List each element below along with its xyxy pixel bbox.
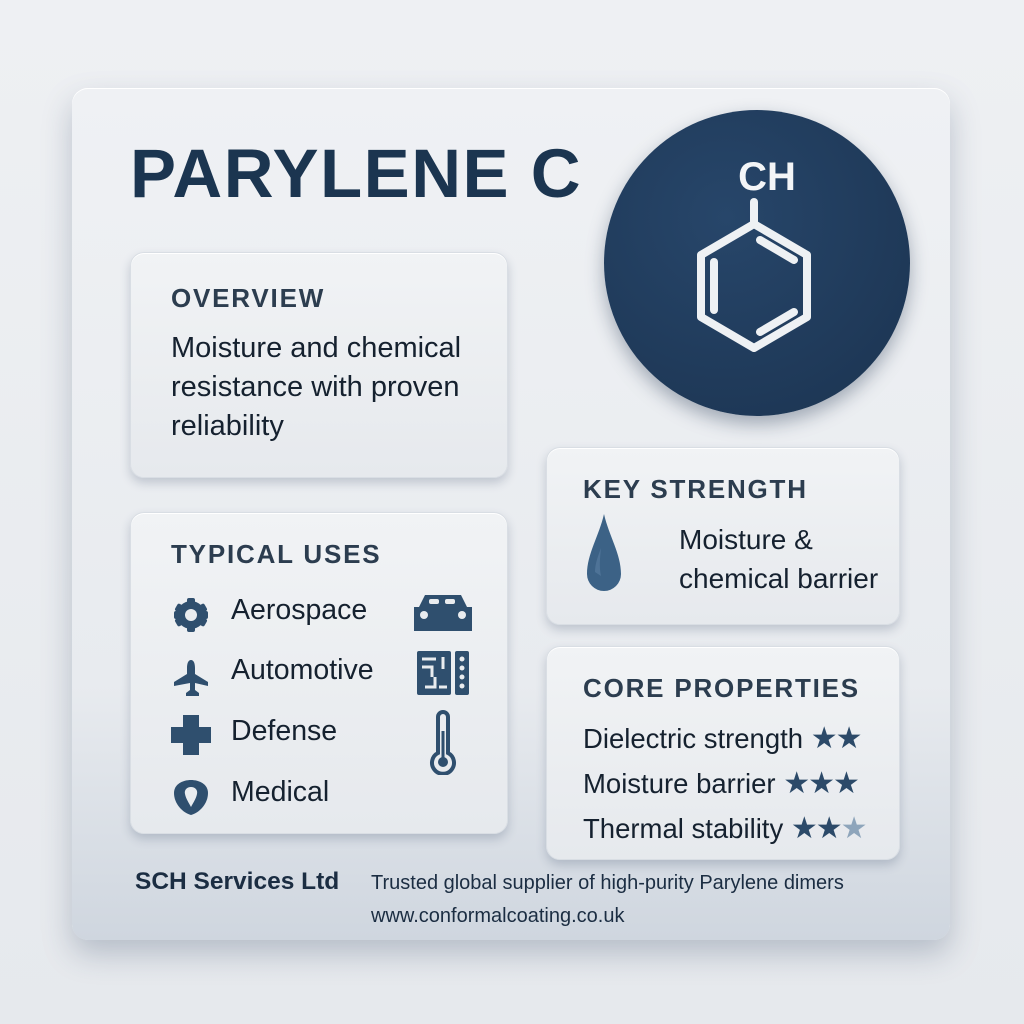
icon: circuit board bbox=[417, 651, 469, 695]
panel: key strength bbox=[546, 447, 900, 625]
label: defense: Defense bbox=[231, 715, 337, 747]
main card bbox=[72, 88, 950, 940]
label: automotive: Automotive bbox=[231, 654, 374, 686]
row: thermal: Thermal stability ★★★ bbox=[583, 812, 866, 845]
icon: plane bbox=[174, 660, 208, 696]
panel: overview bbox=[130, 252, 508, 478]
heading: typical uses: TYPICAL USES bbox=[171, 539, 381, 569]
icon: car bbox=[414, 595, 472, 631]
text: key strength: Moisture & chemical barrier bbox=[679, 524, 878, 594]
heading: core properties: CORE PROPERTIES bbox=[583, 673, 860, 703]
label: aerospace: Aerospace bbox=[231, 594, 367, 626]
panel: core properties bbox=[546, 646, 900, 860]
icon: gear bbox=[174, 598, 208, 632]
row: moisture barrier: Moisture barrier ★★★ bbox=[583, 767, 858, 800]
footer: url: www.conformalcoating.co.uk bbox=[371, 905, 624, 927]
icon: molecule circle: CH bbox=[738, 155, 796, 199]
footer: tagline: Trusted global supplier of high-purity Parylene dimers bbox=[371, 872, 844, 894]
label: medical: Medical bbox=[231, 776, 329, 808]
panel: typical uses bbox=[130, 512, 508, 834]
title: PARYLENE C bbox=[130, 135, 582, 212]
footer: company: SCH Services Ltd bbox=[135, 868, 339, 895]
heading: key strength: KEY STRENGTH bbox=[583, 474, 808, 504]
icon: molecule circle bbox=[604, 110, 910, 416]
row: dielectric: Dielectric strength ★★ bbox=[583, 722, 861, 755]
icon: water drop bbox=[587, 514, 621, 591]
icon: cross bbox=[171, 715, 211, 755]
icon: thermometer bbox=[430, 710, 456, 775]
heading: overview: OVERVIEW bbox=[171, 283, 325, 313]
icon: shield bbox=[174, 780, 208, 815]
text: overview: Moisture and chemical resistance with proven reliability bbox=[171, 332, 461, 442]
